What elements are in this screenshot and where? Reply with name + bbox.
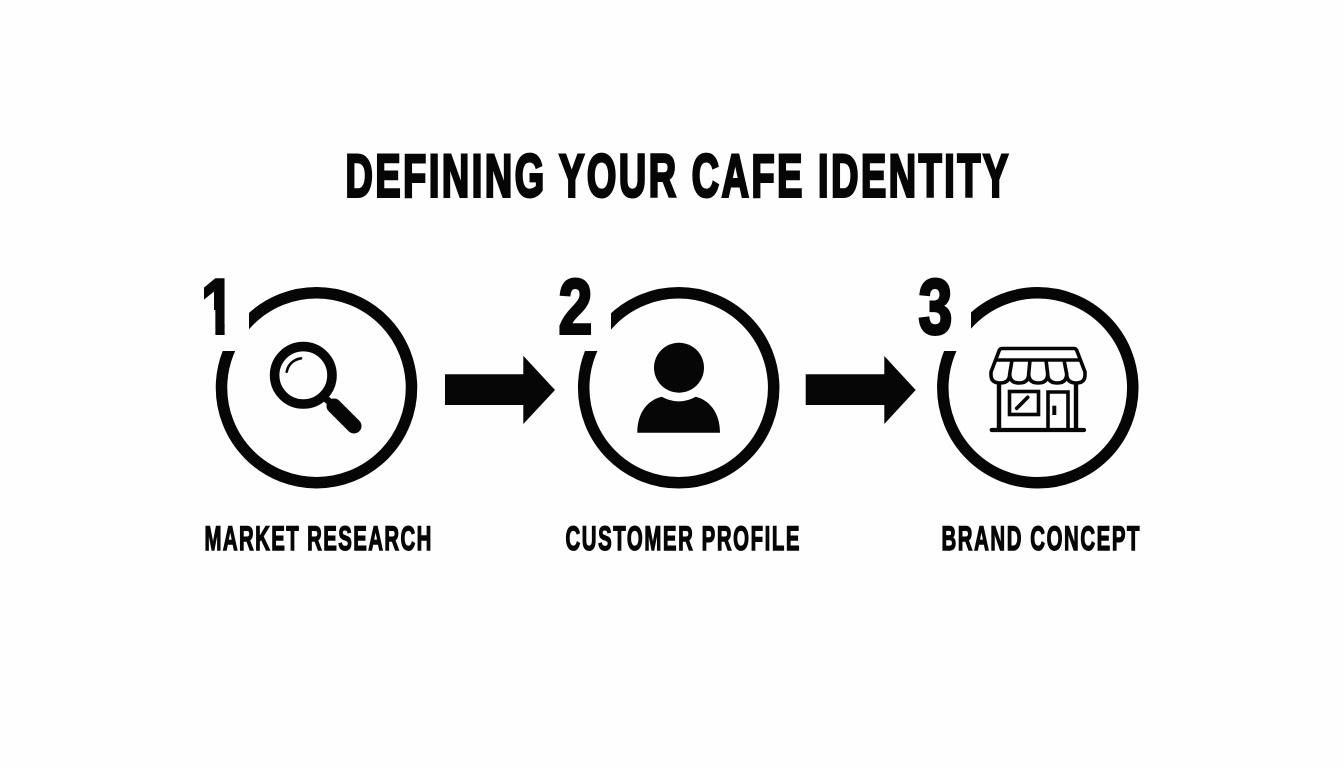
arrow: step 2 to step 3 bbox=[806, 356, 916, 424]
number 1: 1 bbox=[201, 263, 235, 350]
step 1 label: MARKET RESEARCH bbox=[204, 520, 431, 557]
icon: storefront bbox=[991, 348, 1085, 430]
panel: step 3 brand concept bbox=[918, 263, 1140, 557]
step 2 label: CUSTOMER PROFILE bbox=[566, 520, 799, 557]
ring: step 2 bbox=[560, 275, 774, 483]
panel: step 1 market research bbox=[200, 263, 431, 557]
arrow: step 1 to step 2 bbox=[445, 356, 555, 424]
step 3 label: BRAND CONCEPT bbox=[942, 520, 1140, 557]
icon: magnifying glass bbox=[275, 347, 354, 426]
ring: step 1 bbox=[200, 275, 412, 483]
icon: person bbox=[637, 343, 720, 433]
panel: step 2 customer profile bbox=[558, 263, 800, 557]
ring: step 3 bbox=[920, 275, 1133, 483]
title: DEFINING YOUR CAFE IDENTITY bbox=[346, 143, 1008, 210]
number 2: 2 bbox=[558, 263, 592, 350]
number 3: 3 bbox=[918, 263, 952, 350]
